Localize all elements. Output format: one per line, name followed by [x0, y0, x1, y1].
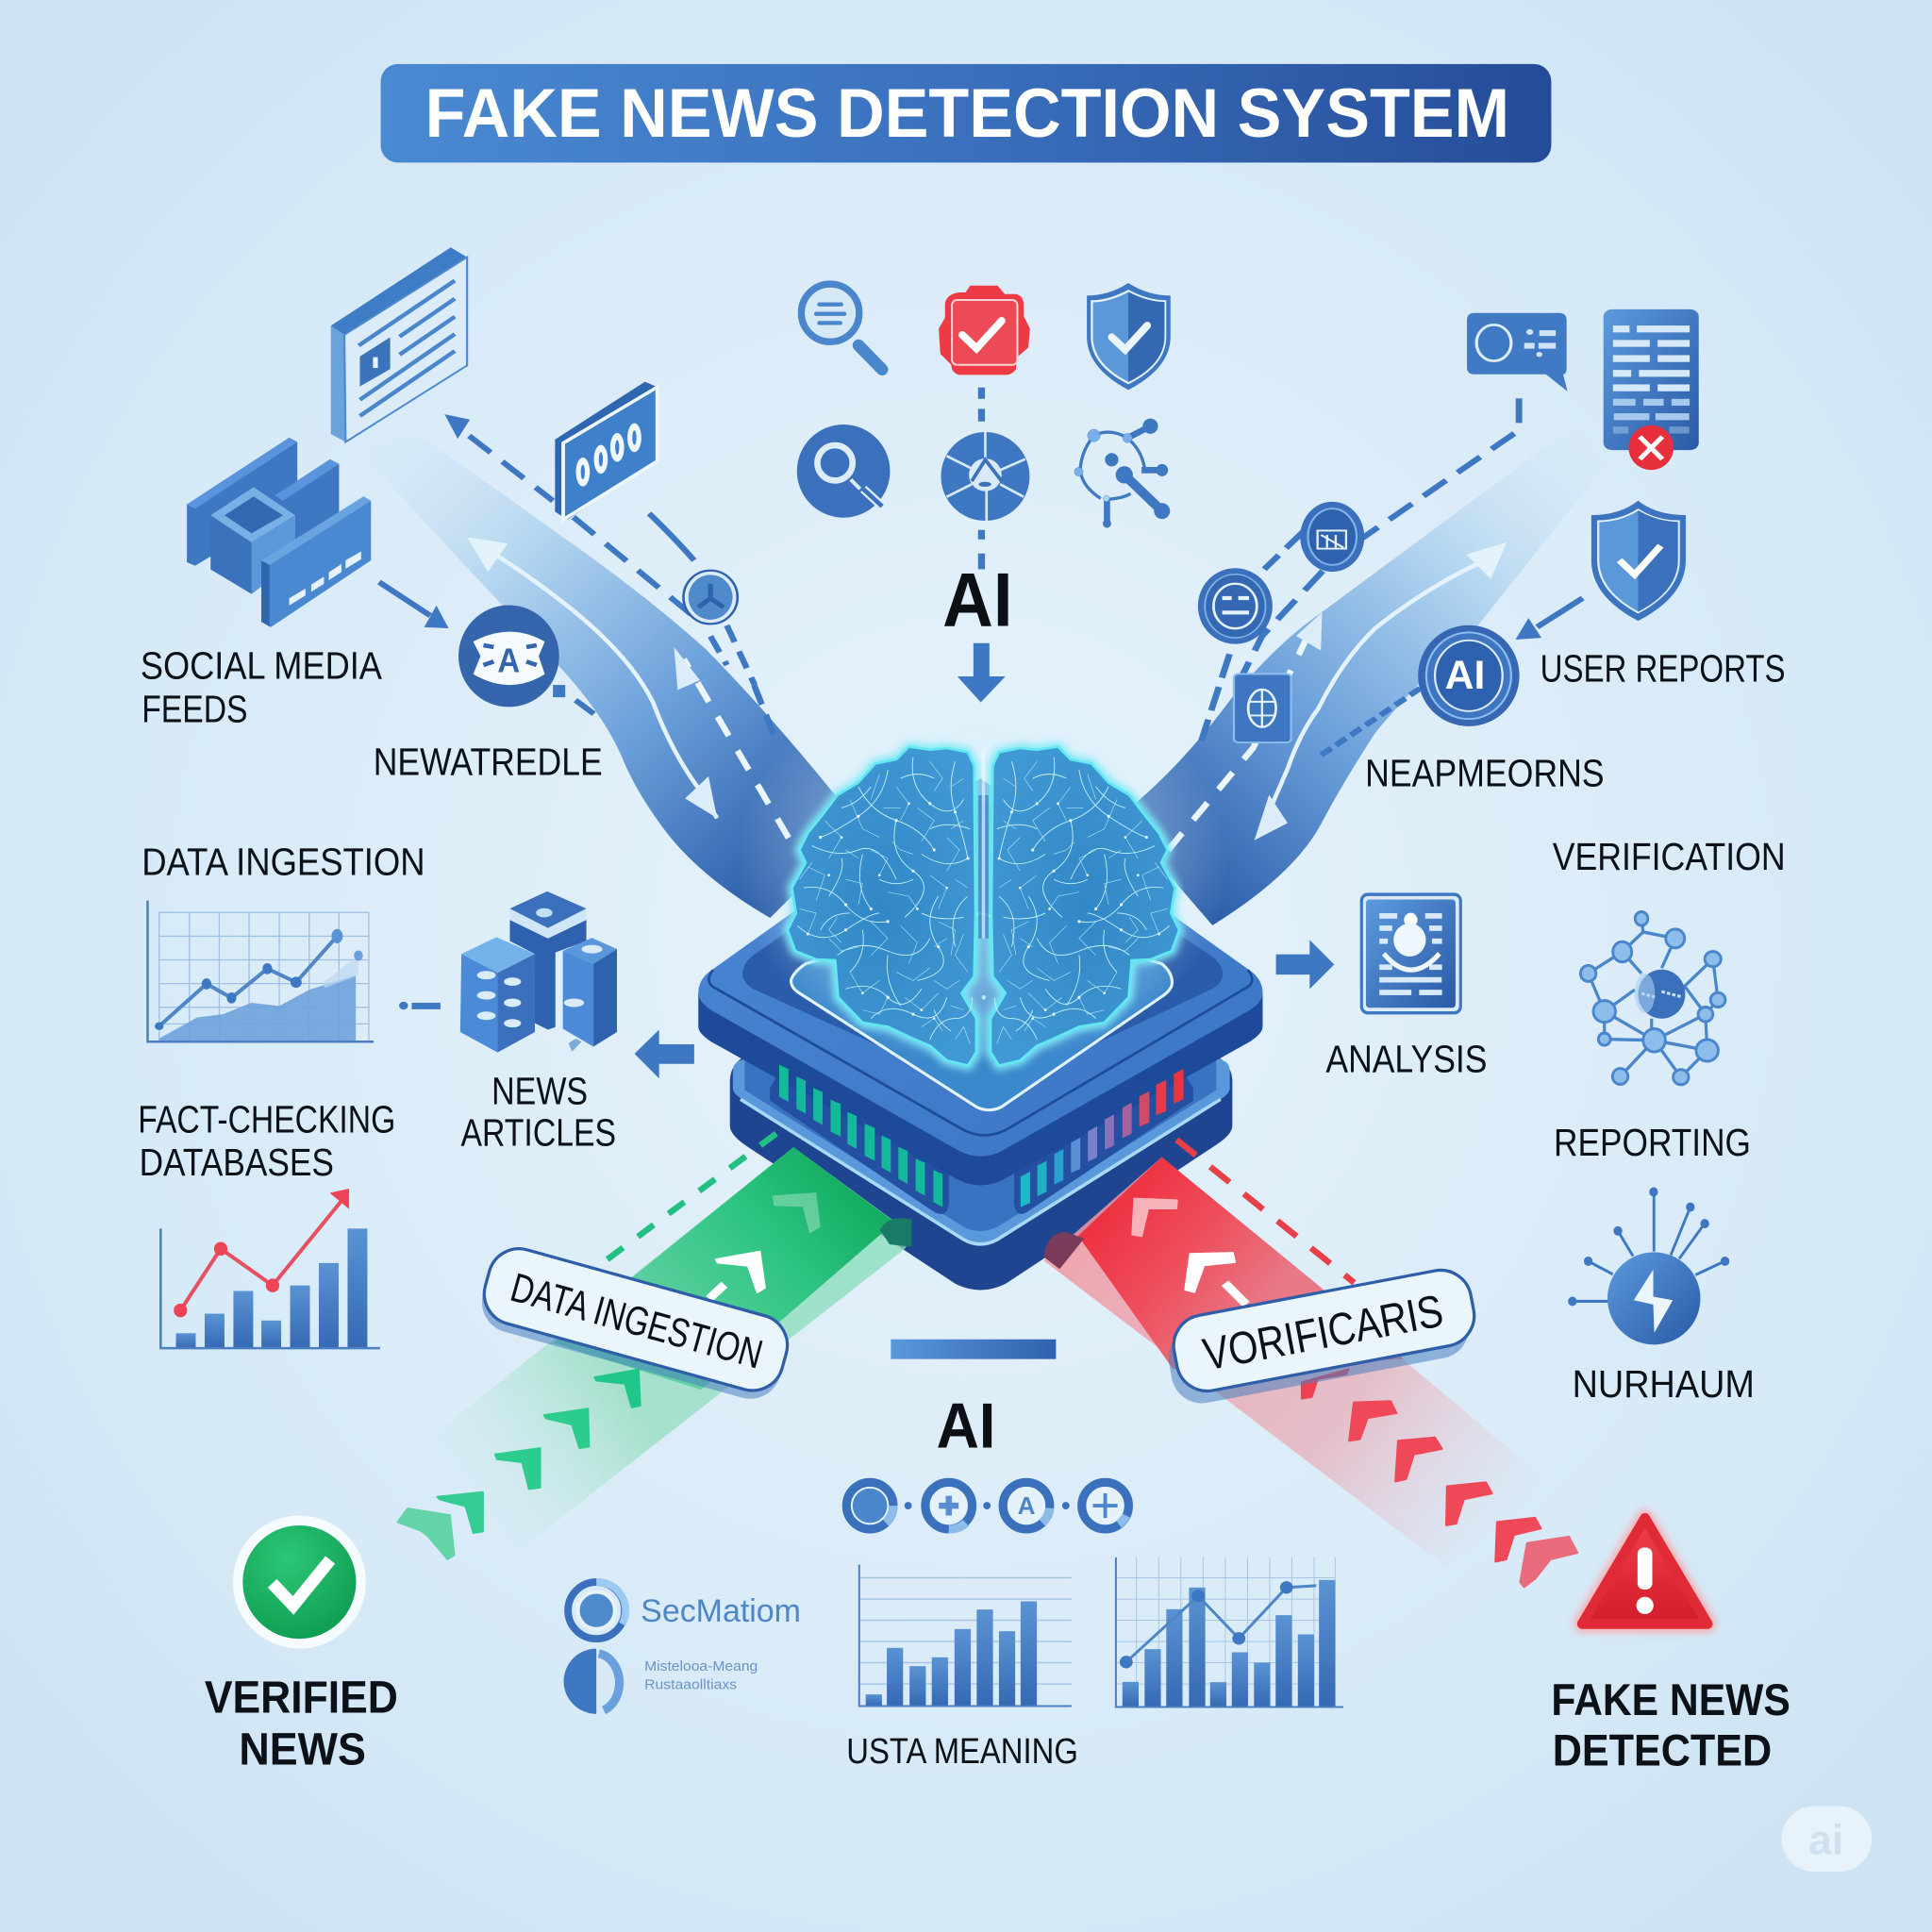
left data ribbon	[358, 432, 850, 918]
icon: counter panel	[555, 382, 658, 520]
icon: verification network	[1580, 912, 1725, 1085]
text labels left: DATABASES	[140, 1141, 334, 1184]
secmatiom legend: SecMatiom	[641, 1593, 801, 1629]
text labels right: NEAPMEORNS	[1365, 751, 1605, 794]
icon: article panel	[331, 247, 467, 442]
secmatiom legend: Mistelooa-Meang	[644, 1659, 758, 1674]
fake news result: FAKE NEWS	[1551, 1674, 1790, 1724]
icon: social feed blocks	[187, 438, 371, 627]
icon: badge upper	[1300, 502, 1364, 572]
dashed link	[553, 685, 594, 714]
text labels right: ANALYSIS	[1325, 1037, 1487, 1080]
step icons row: A	[1018, 1491, 1036, 1520]
pill: verification	[1161, 1265, 1481, 1408]
icon: globe tile	[1234, 674, 1291, 742]
icon: chat bubble	[1467, 313, 1568, 391]
top center AI tools	[797, 283, 1171, 569]
arrow: feeds to badge	[379, 582, 449, 628]
watermark	[1782, 1807, 1872, 1872]
arrow: dashed to article	[444, 414, 702, 624]
arrow: shield to AI badge	[1515, 598, 1583, 640]
icon: AI badge: AI	[1445, 653, 1485, 698]
fake output beam	[1043, 1140, 1577, 1587]
chart: data ingestion	[147, 900, 374, 1041]
verified news result: VERIFIED	[205, 1673, 398, 1724]
chip base	[730, 922, 1232, 1290]
icon: bolt hub	[1568, 1188, 1729, 1344]
icon: small node	[684, 571, 738, 624]
label: AI top: AI	[942, 558, 1013, 643]
icon: solid magnifier	[797, 425, 890, 518]
text labels left: NEWS	[491, 1069, 588, 1112]
neural brain	[788, 747, 1179, 1066]
verified news result	[205, 1516, 398, 1774]
dotted link	[1319, 689, 1420, 757]
dashed link upper	[649, 513, 694, 560]
text labels right: VERIFICATION	[1553, 835, 1786, 878]
secmatiom legend	[564, 1582, 801, 1714]
dashed link into ribbon	[754, 685, 774, 734]
LED bars left	[779, 1065, 942, 1208]
LED bars right	[1021, 1069, 1184, 1208]
icon: network	[1074, 419, 1170, 527]
icon: news buildings	[460, 891, 617, 1053]
left icon cluster	[187, 247, 755, 714]
step icons row	[846, 1482, 1128, 1529]
bar chart: usta meaning	[859, 1564, 1072, 1706]
fake news result: DETECTED	[1553, 1725, 1772, 1775]
icon: magnifier outline	[801, 284, 882, 370]
dashed spine	[971, 388, 991, 569]
central chip processor	[698, 778, 1262, 1290]
label: usta meaning: USTA MEANING	[846, 1732, 1078, 1772]
text labels left: SOCIAL MEDIA	[141, 644, 382, 688]
text labels right: NURHAUM	[1573, 1362, 1755, 1406]
icon: shield right	[1591, 501, 1686, 621]
secmatiom legend: Rustaaolltiaxs	[644, 1678, 737, 1693]
text labels left: ARTICLES	[460, 1111, 616, 1155]
led panels	[770, 1060, 949, 1214]
brain glow halo	[736, 659, 1228, 1066]
text labels right: REPORTING	[1554, 1121, 1751, 1164]
pill: data ingestion: DATA INGESTION	[506, 1265, 767, 1378]
icon: segmented circle	[941, 431, 1029, 522]
arrow: AI down	[958, 643, 1006, 702]
right data ribbon	[1132, 423, 1607, 925]
icon: shield center	[1087, 283, 1171, 390]
text labels left: DATA INGESTION	[142, 840, 425, 883]
label: AI bottom: AI	[937, 1391, 995, 1462]
icon: analysis document	[1361, 894, 1460, 1013]
icon: flagged document	[1604, 309, 1699, 470]
icon: newswire badge	[458, 606, 559, 707]
icon: AI badge	[1418, 625, 1520, 726]
pill: data ingestion	[475, 1241, 794, 1406]
text labels left: NEWATREDLE	[374, 741, 603, 784]
chart: fact-checking	[160, 1189, 380, 1348]
small dash	[399, 1002, 441, 1009]
fake news result	[1551, 1518, 1790, 1775]
dashed link upper right	[1241, 398, 1519, 679]
arrow: chip to analysis	[1276, 940, 1334, 989]
text labels left: FEEDS	[142, 687, 248, 730]
chip upper slab	[698, 993, 1262, 1186]
right icon cluster	[1198, 309, 1699, 757]
combo chart	[1116, 1557, 1343, 1707]
left mid charts and buildings	[147, 891, 694, 1348]
verified news result: NEWS	[239, 1724, 366, 1774]
pill: verification: VORIFICARIS	[1199, 1286, 1447, 1380]
right column icons	[1276, 894, 1729, 1344]
text labels right: USER REPORTS	[1541, 646, 1786, 690]
dashed link to chip	[710, 625, 755, 685]
title banner: FAKE NEWS DETECTION SYSTEM	[425, 75, 1509, 152]
icon: red check badge	[939, 286, 1030, 375]
watermark: ai	[1808, 1818, 1843, 1864]
text labels left	[138, 644, 616, 1184]
icon: newswire badge: A	[497, 642, 520, 680]
text labels right	[1325, 646, 1786, 1406]
arrow: chip to news	[635, 1030, 694, 1078]
chip lip	[733, 956, 1230, 1243]
text labels left: FACT-CHECKING	[138, 1097, 395, 1141]
dashed link middle	[1202, 529, 1306, 741]
verified output beam	[397, 1134, 912, 1559]
divider bar	[891, 1340, 1056, 1359]
icon: badge lower	[1198, 568, 1273, 644]
